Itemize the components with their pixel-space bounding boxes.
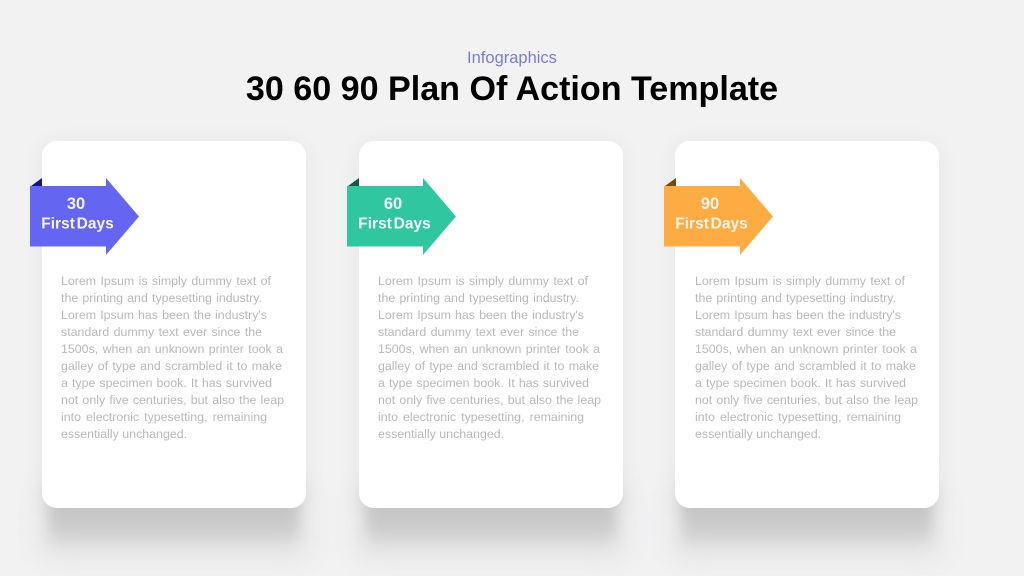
text: description: 1500s, when an unknown printer took a bbox=[61, 342, 283, 356]
text: description: a type specimen book. It has survived bbox=[61, 376, 272, 390]
text: description: essentially unchanged. bbox=[378, 427, 504, 441]
arrow: 30 first days: 30 bbox=[67, 195, 85, 213]
arrow: 90 first days: 90 bbox=[700, 195, 719, 213]
text: description: not only five centuries, but also the leap bbox=[61, 393, 284, 407]
text: description: galley of type and scrambled it to make bbox=[695, 359, 916, 373]
text: description bbox=[378, 274, 601, 441]
text: description: into electronic typesetting, remaining bbox=[695, 410, 901, 424]
text: description: a type specimen book. It has survived bbox=[695, 376, 906, 390]
text: description: the printing and typesetting industry. bbox=[695, 291, 896, 305]
text: description: Lorem Ipsum is simply dummy text of bbox=[378, 274, 588, 288]
text: description: 1500s, when an unknown printer took a bbox=[695, 342, 917, 356]
text: description: into electronic typesetting, remaining bbox=[61, 410, 267, 424]
panel: 30 first days bbox=[30, 141, 313, 560]
text: description bbox=[61, 274, 284, 441]
text: description: into electronic typesetting, remaining bbox=[378, 410, 584, 424]
text: description bbox=[695, 274, 918, 441]
text: description: standard dummy text ever since the bbox=[61, 325, 262, 339]
arrow: 60 first days: First Days bbox=[358, 216, 431, 232]
title: 30 60 90 Plan Of Action Template bbox=[246, 70, 778, 108]
text: description: essentially unchanged. bbox=[695, 427, 821, 441]
arrow: 30 first days: First Days bbox=[41, 216, 114, 232]
text: description: not only five centuries, but also the leap bbox=[378, 393, 601, 407]
text: description: not only five centuries, but also the leap bbox=[695, 393, 918, 407]
text: description: standard dummy text ever since the bbox=[695, 325, 896, 339]
text: description: galley of type and scrambled it to make bbox=[378, 359, 599, 373]
arrow: 90 first days: First Days bbox=[675, 216, 747, 232]
text: description: 1500s, when an unknown printer took a bbox=[378, 342, 600, 356]
text: description: the printing and typesetting industry. bbox=[61, 291, 262, 305]
text: description: a type specimen book. It has survived bbox=[378, 376, 589, 390]
panel: 60 first days bbox=[347, 141, 630, 560]
arrow: 60 first days bbox=[347, 178, 456, 255]
text: description: Lorem Ipsum has been the industry's bbox=[378, 308, 584, 322]
subtitle: Infographics bbox=[467, 48, 557, 66]
text: description: standard dummy text ever since the bbox=[378, 325, 579, 339]
arrow: 30 first days bbox=[30, 178, 139, 255]
panel: 90 first days bbox=[664, 141, 946, 560]
text: description: the printing and typesetting industry. bbox=[378, 291, 579, 305]
text: description: galley of type and scrambled it to make bbox=[61, 359, 282, 373]
text: description: essentially unchanged. bbox=[61, 427, 187, 441]
arrow: 90 first days bbox=[664, 178, 773, 255]
text: description: Lorem Ipsum has been the industry's bbox=[695, 308, 901, 322]
text: description: Lorem Ipsum is simply dummy text of bbox=[61, 274, 271, 288]
text: description: Lorem Ipsum is simply dummy text of bbox=[695, 274, 905, 288]
text: description: Lorem Ipsum has been the industry's bbox=[61, 308, 267, 322]
arrow: 60 first days: 60 bbox=[384, 195, 402, 213]
